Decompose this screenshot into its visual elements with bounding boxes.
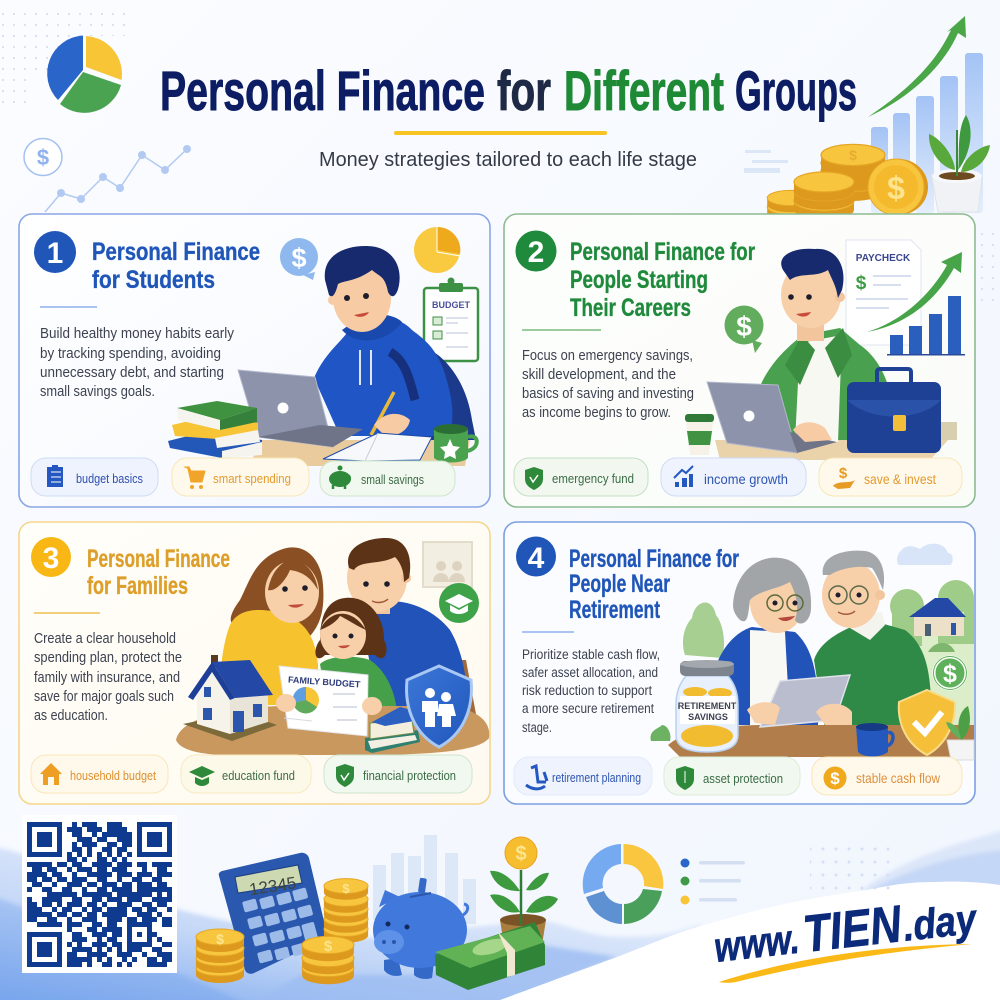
- panel 4: near retirement: [504, 522, 975, 804]
- pill: income growth: [661, 458, 806, 496]
- pill: save and invest: save & invest: [864, 472, 936, 487]
- graduation badge: [439, 583, 479, 623]
- website: [711, 887, 981, 983]
- panel 3 heading: Personal Finance: [87, 545, 230, 573]
- calculator: [219, 853, 328, 974]
- panel 3 description: family with insurance, and: [34, 670, 180, 686]
- panel 1 number badge: 1: [47, 237, 63, 270]
- stacked books: [168, 401, 262, 458]
- panel 4 heading: Personal Finance for: [569, 545, 739, 573]
- speech bubble dollar: [280, 238, 318, 280]
- coin stacks top right: [767, 144, 928, 221]
- line chart decoration: [45, 145, 191, 212]
- student illustration: [238, 246, 477, 466]
- budget clipboard: [424, 278, 478, 361]
- plant top right: [929, 115, 990, 212]
- books: [365, 707, 420, 753]
- title: [160, 59, 857, 122]
- pill: emergency fund: emergency fund: [552, 471, 634, 486]
- money stack: [435, 922, 545, 990]
- panel 2 card: [504, 214, 975, 507]
- panel 2 heading: Their Careers: [570, 294, 691, 322]
- pill: budget basics: budget basics: [76, 471, 143, 486]
- faded skyline bars: [373, 835, 476, 924]
- pill: education fund: education fund: [222, 768, 295, 783]
- pill: asset protection: [664, 757, 800, 795]
- panel 3 description: save for major goals such: [34, 689, 174, 705]
- panel 3 number badge: 3: [43, 542, 59, 575]
- panel 4 number badge: [516, 536, 556, 576]
- background dots right: [978, 230, 1000, 310]
- tablet with hands: [747, 675, 852, 727]
- family budget sheet: [279, 666, 368, 736]
- blue mug: [856, 723, 893, 756]
- panel 2 heading: People Starting: [570, 266, 708, 294]
- panel 3: families: [19, 522, 490, 804]
- briefcase: [847, 369, 957, 453]
- panel 1 description: small savings goals.: [40, 384, 155, 400]
- icon: dollar circle: [24, 138, 62, 176]
- panel 1: students: [19, 214, 490, 507]
- panel 3 description: spending plan, protect the: [34, 650, 182, 666]
- white swoosh: [500, 882, 1000, 1000]
- title underline: [394, 131, 607, 135]
- panel 1 description: by tracking spending, avoiding: [40, 346, 221, 362]
- panel 4 description: a more secure retirement: [522, 701, 654, 716]
- panel 3 description: as education.: [34, 708, 108, 724]
- yellow pie: [414, 227, 460, 273]
- dollar badge: [934, 656, 966, 690]
- title: Personal Finance: [160, 59, 485, 122]
- pill: asset protection: asset protection: [703, 771, 783, 786]
- dollar badge: $: [943, 660, 957, 688]
- title: Different: [564, 59, 724, 122]
- pill: income growth: income growth: [704, 471, 788, 487]
- panel 4 card: [504, 522, 975, 804]
- panel 3 heading: for Families: [87, 572, 188, 600]
- paycheck document: [846, 240, 921, 345]
- panel 1 heading: for Students: [92, 266, 215, 294]
- pill: budget basics: [31, 458, 158, 496]
- panel 4 description: Prioritize stable cash flow,: [522, 647, 660, 662]
- footer dots: [810, 840, 890, 892]
- pill: retirement planning: retirement planning: [552, 770, 641, 785]
- panel 3 heading: [87, 545, 230, 600]
- pill: save and invest: [819, 458, 962, 496]
- sapling with coin: [490, 837, 558, 945]
- panel 1 description: Build healthy money habits early: [40, 326, 235, 342]
- pill: small savings: small savings: [361, 472, 424, 487]
- speech bubble green: $: [736, 311, 752, 342]
- title: Groups: [735, 59, 857, 122]
- family illustration: [176, 538, 489, 755]
- panel 4 heading: [569, 545, 739, 624]
- QR code: [22, 815, 177, 973]
- pill: financial protection: [324, 755, 472, 793]
- panel 1 number badge: [34, 231, 76, 273]
- yellow shield: [899, 690, 955, 755]
- panel 2 description: [522, 348, 694, 421]
- pill: stable cash flow: $: [830, 769, 840, 788]
- website: TIEN: [800, 895, 905, 964]
- panel 2 description: skill development, and the: [522, 367, 676, 383]
- pill: save and invest: $: [839, 465, 848, 482]
- yellow swoosh under website: [719, 944, 972, 983]
- panel 4 description: risk reduction to support: [522, 683, 652, 698]
- panel 4 description: safer asset allocation, and: [522, 665, 658, 680]
- panel 2 description: as income begins to grow.: [522, 405, 671, 421]
- small plant: [946, 706, 974, 760]
- sapling with coin: $: [515, 843, 527, 865]
- panel 2 number badge: 2: [528, 236, 544, 269]
- panel 1 card: [19, 214, 490, 507]
- pill: stable cash flow: [812, 757, 962, 795]
- title: for: [497, 59, 551, 122]
- pill: household budget: [31, 755, 168, 793]
- panel 1 description: unnecessary debt, and starting: [40, 365, 224, 381]
- icon: dollar circle: $: [37, 145, 49, 170]
- table: [668, 725, 974, 757]
- panel 3 number badge: [31, 537, 71, 577]
- panel 1 description: [40, 326, 235, 400]
- panel 3 card: [19, 522, 490, 804]
- landscape backdrop: [683, 544, 974, 725]
- retirement savings jar: [676, 660, 738, 752]
- panel 2 heading: Personal Finance for: [570, 238, 755, 266]
- bar chart with arrow: [867, 252, 965, 356]
- coin stacks footer: $: [324, 938, 333, 955]
- pill: retirement planning: [514, 757, 652, 795]
- panel 2 heading: [570, 238, 755, 322]
- panel 4 number badge: 4: [528, 542, 545, 575]
- panel 2 description: basics of saving and investing: [522, 386, 694, 402]
- grandfather: [814, 551, 931, 730]
- panel 1 heading: [92, 238, 260, 294]
- pill: emergency fund: [514, 458, 648, 496]
- pill: stable cash flow: stable cash flow: [856, 771, 940, 786]
- pill: education fund: [181, 755, 311, 793]
- bar chart decoration top right: [871, 53, 983, 213]
- website: www.: [712, 915, 801, 971]
- panel 3 description: [34, 631, 182, 724]
- young professional illustration: [707, 249, 948, 460]
- donut legend: [680, 858, 745, 904]
- coin stacks top right: $: [849, 147, 857, 163]
- panel 3 description: Create a clear household: [34, 631, 176, 647]
- coin stacks top right: $: [887, 170, 905, 206]
- website: .day: [901, 895, 981, 950]
- footer wave background: [0, 830, 1000, 1000]
- coin stacks footer: $: [342, 881, 350, 896]
- paycheck document: PAYCHECK: [856, 253, 911, 264]
- picture frame: [423, 542, 472, 587]
- coin stacks footer: $: [216, 931, 224, 947]
- coffee cup: [685, 414, 714, 455]
- panel 4 description: stage.: [522, 720, 552, 735]
- pill: small savings: [320, 461, 455, 496]
- growth arrow top right: [868, 16, 966, 117]
- panel 1 heading: Personal Finance: [92, 238, 260, 266]
- model house: [183, 655, 277, 741]
- paycheck document: $: [856, 273, 867, 294]
- calculator: 12345: [248, 873, 298, 899]
- faint lines: [744, 150, 788, 173]
- pill: smart spending: smart spending: [213, 471, 291, 486]
- pie chart icon: [47, 36, 122, 113]
- panel 2 description: Focus on emergency savings,: [522, 348, 693, 364]
- panel 2: careers: [504, 214, 975, 507]
- panel 4 heading: People Near: [569, 570, 670, 598]
- donut chart: [583, 844, 663, 924]
- small bush: [651, 725, 671, 741]
- subtitle: Money strategies tailored to each life stage: [319, 148, 697, 171]
- background dots top left: [0, 8, 130, 112]
- pill: financial protection: financial protection: [363, 768, 456, 783]
- piggy bank: [373, 878, 468, 979]
- pill: smart spending: [172, 458, 309, 496]
- retirement savings jar: SAVINGS: [688, 712, 728, 722]
- panel 4 heading: Retirement: [569, 596, 660, 624]
- budget clipboard: BUDGET: [432, 300, 471, 310]
- panel 4 description: [522, 647, 660, 735]
- panel 2 number badge: [516, 230, 556, 272]
- family budget sheet: FAMILY BUDGET: [288, 674, 361, 690]
- pill: household budget: household budget: [70, 768, 156, 783]
- speech bubble dollar: $: [291, 243, 307, 273]
- coin stacks footer: [196, 879, 368, 984]
- protection shield: [407, 666, 471, 747]
- hands on sheet: [276, 694, 382, 715]
- speech bubble green: [724, 306, 764, 353]
- retirement savings jar: RETIREMENT: [678, 701, 737, 711]
- grandmother: [712, 558, 818, 725]
